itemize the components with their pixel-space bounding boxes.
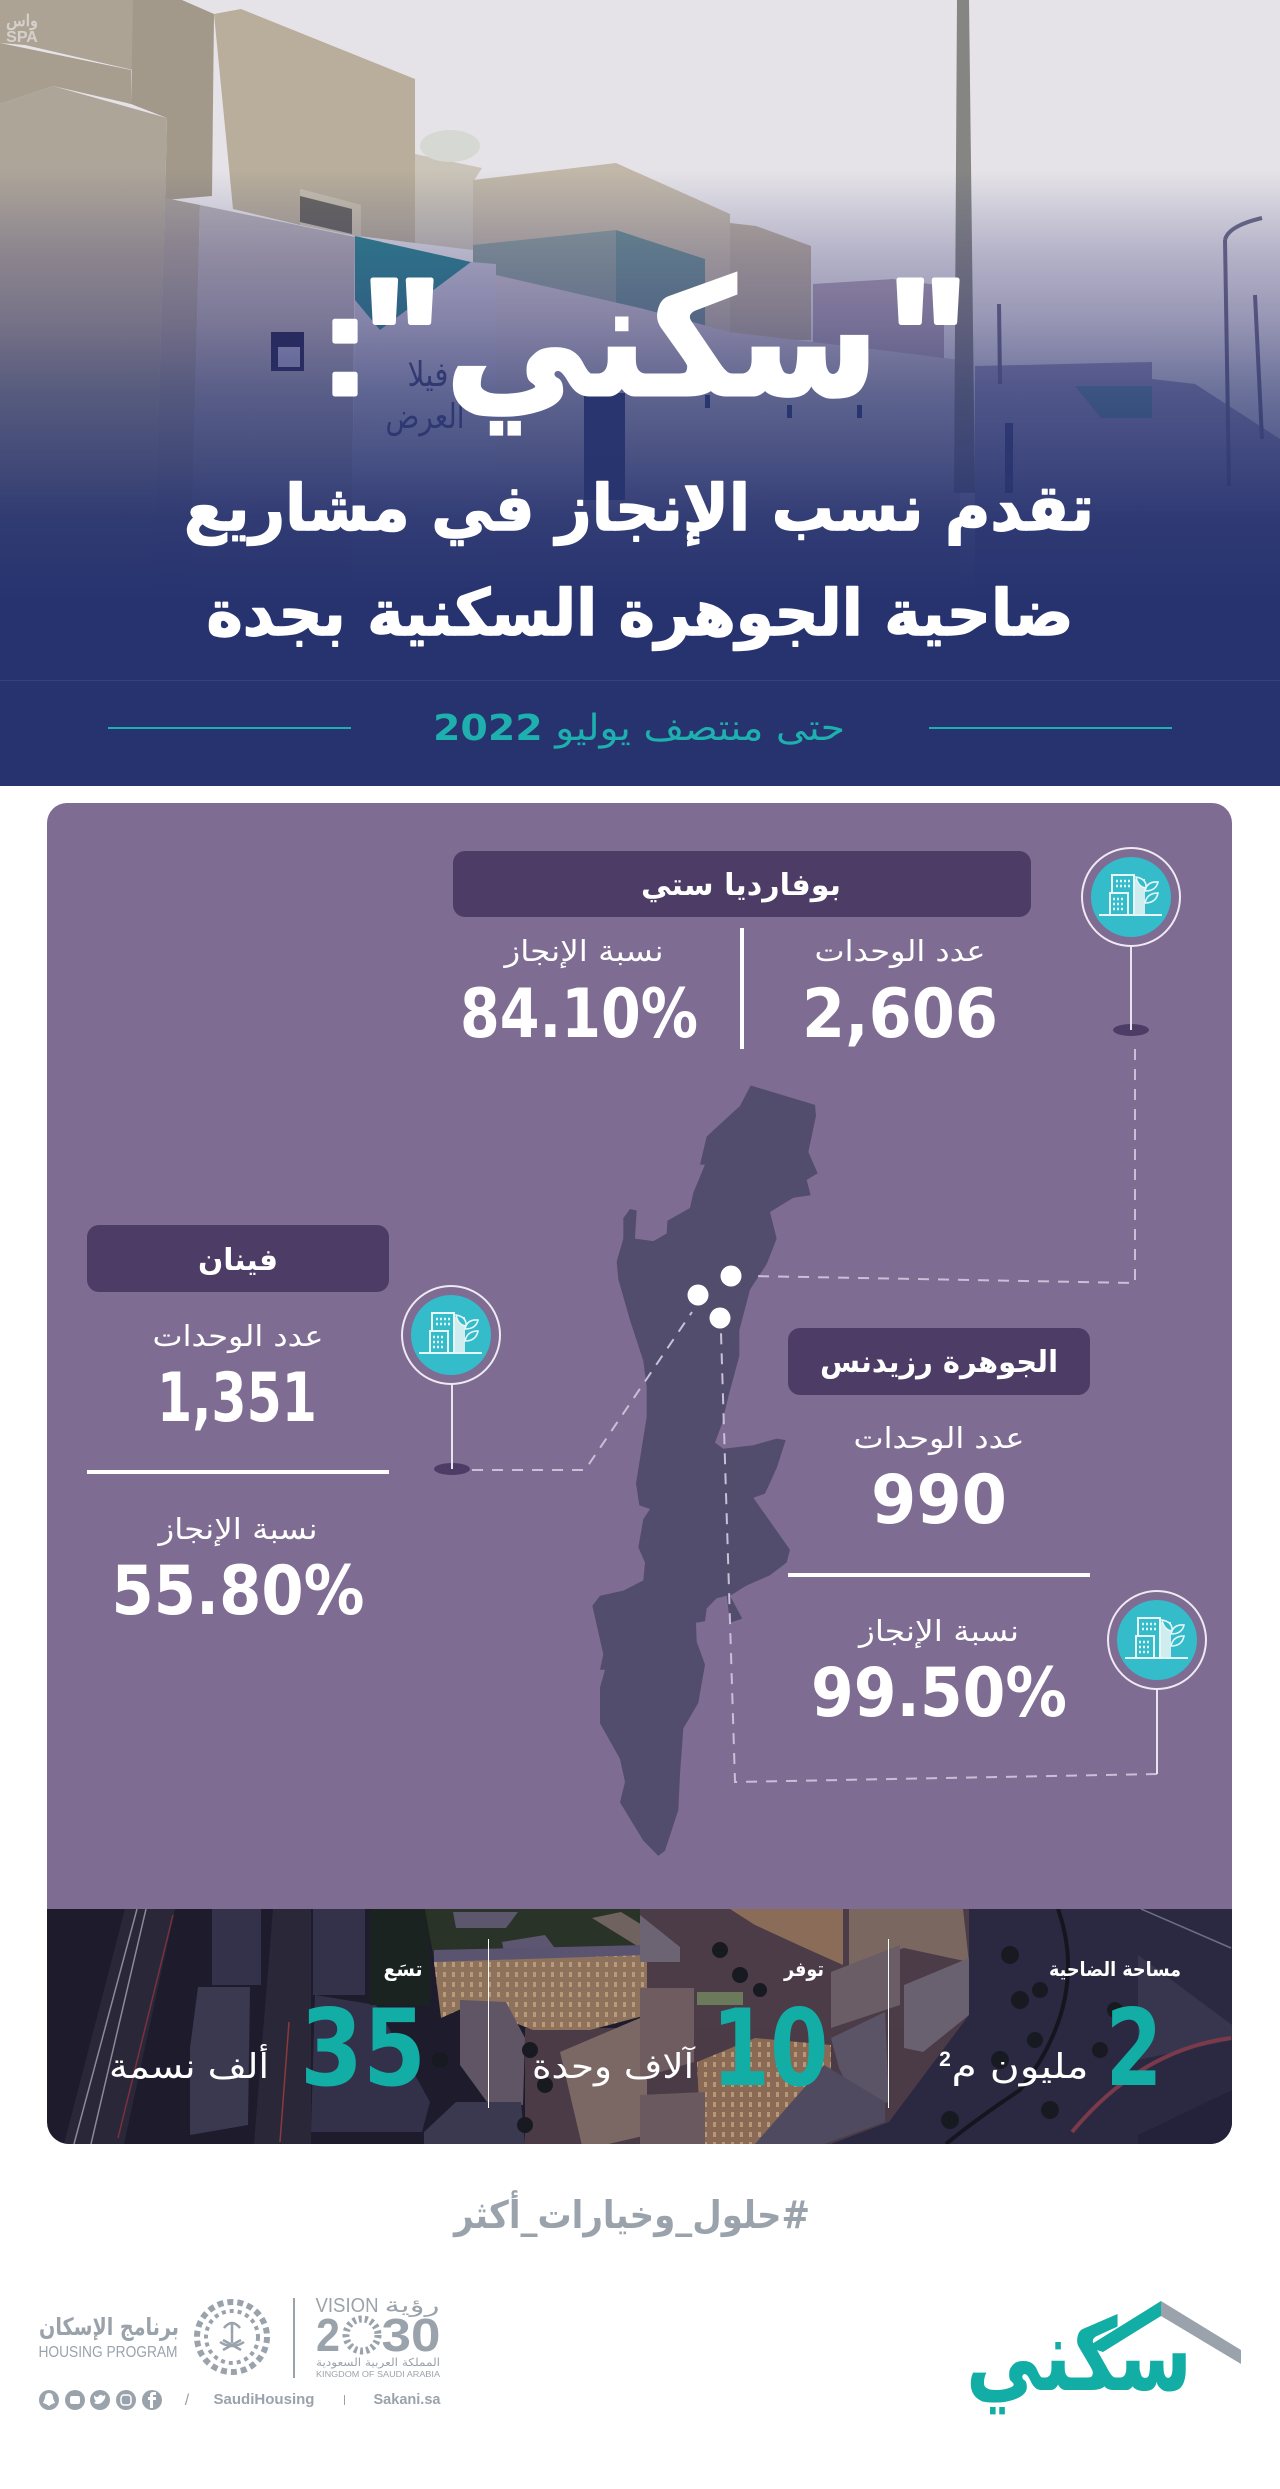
aerial photo strip xyxy=(47,1909,1232,2150)
hashtag: #حلول_وخيارات_أكثر xyxy=(452,2190,810,2238)
date line: حتى منتصف يوليو 2022 xyxy=(433,708,845,749)
housing program label: برنامج الإسكان xyxy=(39,2313,179,2341)
stat: population: تسَع xyxy=(384,1957,422,1981)
project block: Finan xyxy=(87,1225,389,1631)
hero date band xyxy=(0,680,1280,786)
icon: national emblem xyxy=(197,2302,267,2372)
housing program label xyxy=(38,2313,179,2361)
stat: area xyxy=(939,1957,1181,2110)
project block: Finan: عدد الوحدات xyxy=(152,1319,324,1353)
dashed connectors xyxy=(472,1049,1157,1782)
hero photo: housing street: العرض xyxy=(386,397,464,437)
stat: area: مساحة الضاحية xyxy=(1049,1957,1181,1981)
project block: Buvardia City: بوفارديا ستي xyxy=(641,868,841,903)
stat: units: 10 xyxy=(712,1987,828,2110)
project block: Buvardia City: نسبة الإنجاز xyxy=(502,934,664,969)
hero photo: housing street xyxy=(0,0,1280,786)
pin: Jawhara Residence xyxy=(1108,1591,1206,1774)
project block: Jawhara Residence: عدد الوحدات xyxy=(854,1421,1024,1455)
logo: Vision 2030 xyxy=(316,2293,441,2379)
social handles xyxy=(185,2391,441,2409)
logo: Sakani: سكني xyxy=(966,2297,1192,2415)
map location dots xyxy=(688,1266,742,1328)
logo: Vision 2030: KINGDOM OF SAUDI ARABIA xyxy=(316,2370,441,2379)
hero colour overlay xyxy=(0,0,1280,786)
title: : xyxy=(321,264,369,425)
social media icons xyxy=(39,2390,162,2410)
social handles: Sakani.sa xyxy=(374,2391,441,2408)
stat: population: 35 xyxy=(300,1987,426,2110)
stat: area: 2 xyxy=(1106,1987,1162,2110)
panel: suburb facts xyxy=(47,1909,1232,2150)
social handles: / xyxy=(185,2392,190,2409)
project block: Finan: نسبة الإنجاز xyxy=(156,1512,318,1547)
project block: Buvardia City: 2,606 xyxy=(802,975,998,1054)
project block: Buvardia City: 84.10% xyxy=(460,975,698,1054)
title: " xyxy=(362,244,442,434)
divider xyxy=(293,2298,295,2378)
subtitle line 1: تقدم نسب الإنجاز في مشاريع xyxy=(184,472,1094,546)
project block: Jawhara Residence xyxy=(788,1328,1090,1733)
logo: Vision 2030: 30 xyxy=(382,2309,440,2361)
hero photo: housing street: فيلا xyxy=(408,355,448,395)
project block: Jawhara Residence: 990 xyxy=(871,1461,1007,1540)
project block: Jawhara Residence: نسبة الإنجاز xyxy=(857,1614,1019,1649)
project block: Buvardia City: عدد الوحدات xyxy=(814,934,986,968)
title: " xyxy=(888,244,968,434)
hero photo: housing street: SPA xyxy=(6,29,38,46)
stat: units: توفر xyxy=(783,1957,824,1981)
stat: units: آلاف وحدة xyxy=(532,2046,696,2087)
logo: Vision 2030: المملكة العربية السعودية xyxy=(316,2356,440,2369)
panel: projects map xyxy=(47,803,1232,1909)
project block: Finan: فينان xyxy=(198,1243,278,1278)
map of suburb xyxy=(592,1086,818,1856)
social handles: SaudiHousing xyxy=(214,2391,314,2408)
stat: population: ألف نسمة xyxy=(109,2044,269,2087)
logo: Vision 2030: 2 xyxy=(316,2309,340,2361)
project block: Jawhara Residence: 99.50% xyxy=(811,1654,1067,1733)
pin: Buvardia City xyxy=(1082,848,1180,1036)
stat: units xyxy=(532,1957,828,2110)
logo: Vision 2030: VISION xyxy=(316,2295,378,2317)
subtitle line 2: ضاحية الجوهرة السكنية بجدة xyxy=(206,577,1074,651)
title: سكني xyxy=(445,246,879,434)
stat: area: مليون م xyxy=(952,2047,1088,2087)
project block: Buvardia City xyxy=(453,851,1031,1054)
project block: Jawhara Residence: الجوهرة رزيدنس xyxy=(820,1345,1058,1380)
housing program label: HOUSING PROGRAM xyxy=(38,2344,178,2361)
logo: Vision 2030: رؤية xyxy=(384,2293,440,2317)
stat: area: 2 xyxy=(939,2048,951,2071)
project block: Finan: 55.80% xyxy=(112,1552,364,1631)
pin: Finan xyxy=(402,1286,500,1475)
stat: population xyxy=(109,1957,426,2110)
hero photo: housing street: واس xyxy=(6,13,38,31)
project block: Finan: 1,351 xyxy=(157,1359,317,1438)
